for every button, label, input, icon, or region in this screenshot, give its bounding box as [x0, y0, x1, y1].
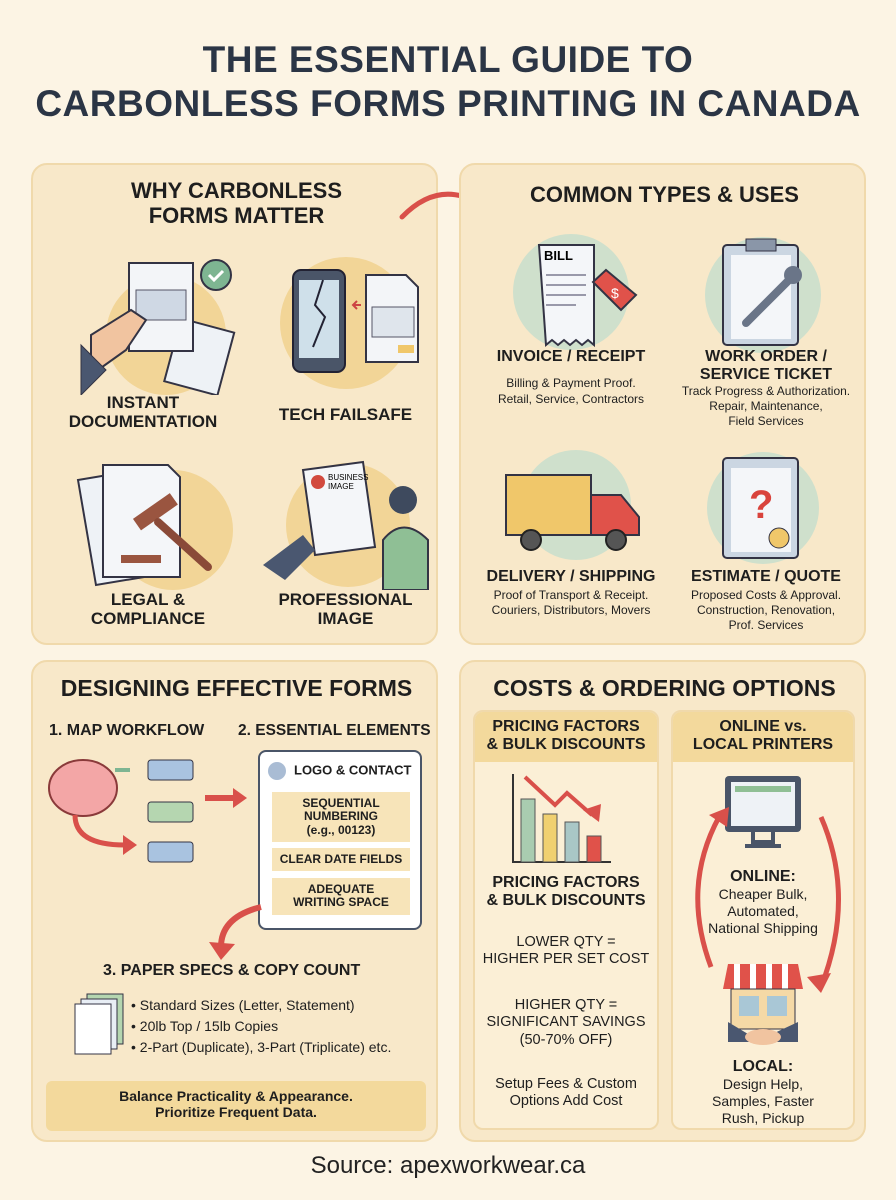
sequential numbering: NUMBERING — [304, 809, 378, 823]
date fields: CLEAR DATE FIELDS — [280, 852, 402, 866]
label: tech failsafe: TECH FAILSAFE — [279, 405, 412, 424]
lower qty: HIGHER PER SET COST — [483, 951, 649, 967]
icon: paper stack — [74, 994, 124, 1054]
label: instant documentation: INSTANT — [107, 393, 179, 412]
label: legal: LEGAL & — [111, 590, 185, 609]
setup fees — [495, 1076, 637, 1109]
label: work order: Repair, Maintenance, — [709, 399, 823, 413]
heading: designing: DESIGNING EFFECTIVE FORMS — [61, 675, 412, 701]
online header: ONLINE vs. — [719, 718, 807, 735]
pricing header: PRICING FACTORS — [492, 718, 640, 735]
label: professional image: IMAGE — [318, 609, 373, 628]
label: work order: Field Services — [728, 414, 804, 428]
lower qty: LOWER QTY = — [516, 934, 616, 950]
label: delivery: DELIVERY / SHIPPING — [487, 568, 655, 585]
label: delivery: Proof of Transport & Receipt. — [494, 588, 648, 602]
arrow: to paper specs — [209, 904, 262, 960]
chart: declining bars — [512, 774, 611, 863]
step 3 label: 3. PAPER SPECS & COPY COUNT — [103, 962, 360, 979]
logo & contact: LOGO & CONTACT — [294, 762, 411, 777]
icon: store handshake — [723, 964, 803, 1045]
icon: professional image — [263, 460, 429, 590]
paper specs list: • 20lb Top / 15lb Copies — [131, 1018, 278, 1034]
pricing header — [475, 712, 657, 762]
label: work order — [682, 348, 850, 428]
label: invoice — [497, 348, 646, 406]
label: work order: WORK ORDER / — [705, 348, 827, 365]
higher qty: HIGHER QTY = — [515, 997, 617, 1013]
label: work order: Track Progress & Authorization. — [682, 384, 850, 398]
local text — [712, 1058, 814, 1126]
label: estimate: Construction, Renovation, — [697, 603, 835, 617]
panel: costs — [459, 660, 866, 1142]
pricing subheading — [486, 874, 646, 909]
label: instant documentation: DOCUMENTATION — [69, 412, 217, 431]
higher qty: (50-70% OFF) — [520, 1032, 612, 1048]
icon: invoice — [513, 234, 638, 350]
heading: why: WHY CARBONLESS — [131, 178, 342, 203]
local text: LOCAL: — [733, 1058, 793, 1075]
paper specs list: • 2-Part (Duplicate), 3-Part (Triplicate) etc. — [131, 1039, 391, 1055]
label: instant documentation — [69, 393, 217, 431]
icon: instant documentation — [80, 259, 236, 395]
label: professional image: PROFESSIONAL — [278, 590, 413, 609]
label: estimate: Proposed Costs & Approval. — [691, 588, 841, 602]
arrows: cycle — [695, 807, 841, 993]
local text: Samples, Faster — [712, 1093, 814, 1109]
writing space: WRITING SPACE — [293, 895, 389, 909]
date fields — [272, 848, 410, 871]
sequential numbering — [272, 792, 410, 842]
icon: delivery truck — [505, 450, 640, 560]
footer: source: Source: apexworkwear.ca — [311, 1152, 585, 1179]
icon: brain workflow — [48, 759, 194, 862]
label: delivery — [487, 568, 655, 617]
pricing header: & BULK DISCOUNTS — [486, 736, 646, 753]
heading: why — [131, 178, 342, 228]
icon: invoice: $ — [611, 285, 619, 301]
pricing subheading: & BULK DISCOUNTS — [486, 892, 646, 909]
writing space — [272, 878, 410, 915]
label: invoice: Billing & Payment Proof. — [506, 376, 636, 390]
title: THE ESSENTIAL GUIDE TO — [203, 39, 693, 80]
callout: balance: Balance Practicality & Appearance. — [119, 1088, 353, 1104]
writing space: ADEQUATE — [308, 882, 374, 896]
label: estimate: ESTIMATE / QUOTE — [691, 568, 841, 585]
label: estimate — [691, 568, 841, 632]
setup fees: Options Add Cost — [510, 1093, 622, 1109]
arrow: to elements — [205, 788, 247, 808]
sequential numbering: SEQUENTIAL — [302, 796, 380, 810]
online text: National Shipping — [708, 920, 818, 936]
paper specs list: • Standard Sizes (Letter, Statement) — [131, 997, 355, 1013]
sub-panel: online vs local — [671, 710, 855, 1130]
online text: Automated, — [727, 903, 799, 919]
setup fees: Setup Fees & Custom — [495, 1076, 637, 1092]
online text: ONLINE: — [730, 868, 796, 885]
online header — [673, 712, 853, 762]
arrow: red curved connector — [400, 192, 459, 220]
sub-panel: pricing — [473, 710, 659, 1130]
icon: legal — [76, 464, 233, 590]
label: legal: COMPLIANCE — [91, 609, 205, 628]
icon: invoice: BILL — [544, 248, 573, 263]
step 2 label: 2. ESSENTIAL ELEMENTS — [238, 722, 431, 739]
heading: costs: COSTS & ORDERING OPTIONS — [493, 675, 836, 701]
heading: why: FORMS MATTER — [149, 203, 324, 228]
online text — [708, 868, 818, 936]
sequential numbering: (e.g., 00123) — [307, 823, 375, 837]
icon: work order — [705, 237, 821, 353]
panel: common types — [459, 163, 866, 645]
icon: professional image: IMAGE — [328, 482, 354, 491]
callout: balance: Prioritize Frequent Data. — [155, 1104, 317, 1120]
label: delivery: Couriers, Distributors, Movers — [492, 603, 650, 617]
form elements card — [258, 750, 422, 930]
icon: estimate — [707, 452, 819, 564]
title: CARBONLESS FORMS PRINTING IN CANADA — [35, 83, 861, 124]
higher qty — [486, 997, 646, 1048]
paper specs list — [131, 997, 391, 1055]
icon: professional image: BUSINESS — [328, 473, 368, 482]
online text: Cheaper Bulk, — [719, 886, 807, 902]
callout: balance — [46, 1081, 426, 1131]
icon: monitor — [725, 776, 801, 848]
higher qty: SIGNIFICANT SAVINGS — [486, 1014, 646, 1030]
label: invoice: Retail, Service, Contractors — [498, 392, 644, 406]
icon: estimate: ? — [749, 483, 773, 527]
heading: common types: COMMON TYPES & USES — [530, 182, 799, 207]
title — [35, 39, 861, 124]
label: work order: SERVICE TICKET — [700, 366, 832, 383]
panel: designing forms — [31, 660, 438, 1142]
label: professional image — [278, 590, 413, 628]
local text: Rush, Pickup — [722, 1110, 804, 1126]
step 1 label: 1. MAP WORKFLOW — [49, 722, 204, 739]
local text: Design Help, — [723, 1076, 803, 1092]
label: legal — [91, 590, 205, 628]
logo & contact — [268, 762, 412, 780]
online header: LOCAL PRINTERS — [693, 736, 833, 753]
label: estimate: Prof. Services — [729, 618, 803, 632]
label: invoice: INVOICE / RECEIPT — [497, 348, 645, 365]
pricing subheading: PRICING FACTORS — [492, 874, 640, 891]
lower qty — [483, 934, 649, 967]
panel: why carbonless — [31, 163, 438, 645]
icon: tech failsafe — [280, 257, 419, 389]
